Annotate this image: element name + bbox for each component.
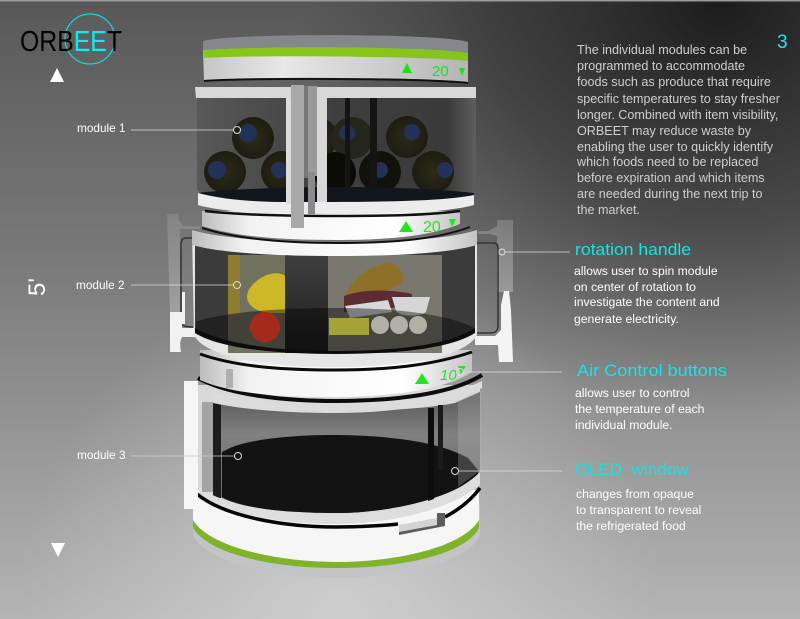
callout: OLED window: OLED window bbox=[575, 460, 690, 479]
module 2 bbox=[167, 214, 513, 370]
base drawer handle bbox=[399, 513, 445, 535]
description paragraph: foods such as produce that require bbox=[577, 75, 771, 89]
refrigerator product illustration bbox=[167, 35, 513, 578]
leader: module 1: module 1 bbox=[77, 121, 126, 135]
callout: OLED window: the refrigerated food bbox=[576, 519, 686, 533]
top unit with temperature display 20: 20 bbox=[432, 63, 449, 80]
leader: module 1 bbox=[77, 121, 240, 135]
height arrow up bbox=[50, 68, 64, 82]
callout: rotation handle: rotation handle bbox=[575, 240, 691, 259]
bottom rim bbox=[198, 193, 474, 214]
description paragraph: programmed to accommodate bbox=[577, 59, 745, 73]
upper rim bbox=[213, 381, 482, 413]
wine bottles bbox=[204, 116, 454, 194]
callout: rotation handle: investigate the content and bbox=[574, 295, 720, 309]
description paragraph: before expiration and which items bbox=[577, 171, 765, 185]
top rim bbox=[192, 230, 477, 256]
lower rim and base line bbox=[200, 472, 480, 524]
callout: Air Control buttons: the temperature of each bbox=[575, 402, 704, 416]
top rim bbox=[195, 87, 476, 202]
description paragraph: the market. bbox=[577, 203, 640, 217]
callout: Air Control buttons: allows user to control bbox=[575, 386, 689, 400]
connector with temperature display 10: 10 bbox=[440, 367, 457, 384]
description paragraph: longer. Combined with item visibility, bbox=[577, 108, 778, 122]
module 1 with wine bottles bbox=[195, 85, 476, 228]
description paragraph: specific temperatures to stay fresher bbox=[577, 92, 780, 106]
shelf bbox=[198, 187, 474, 203]
description paragraph: are needed during the next trip to bbox=[577, 187, 763, 201]
logo: ORBEET: ORBEET bbox=[20, 26, 122, 58]
food photo bbox=[228, 255, 442, 353]
connector with temperature display 10 bbox=[200, 350, 472, 397]
right rotation handle bbox=[475, 220, 513, 362]
door handle bbox=[184, 381, 198, 509]
description paragraph: ORBEET may reduce waste by bbox=[577, 124, 752, 138]
description paragraph: enabling the user to quickly identify bbox=[577, 140, 774, 154]
leader: module 2: module 2 bbox=[76, 278, 125, 292]
base and module 3 bbox=[184, 375, 482, 578]
callout: OLED window bbox=[452, 460, 705, 533]
connector with temperature display 20 bbox=[202, 211, 470, 243]
logo: ORBEET bbox=[20, 14, 122, 64]
window bbox=[195, 243, 475, 353]
connector with temperature display 20: 20 bbox=[423, 219, 441, 236]
leader: module 3: module 3 bbox=[77, 448, 126, 462]
callout: OLED window: to transparent to reveal bbox=[576, 503, 701, 517]
height arrow down bbox=[51, 543, 65, 557]
callout: rotation handle: generate electricity. bbox=[574, 312, 679, 326]
door bars bbox=[291, 85, 304, 228]
OLED window bbox=[220, 392, 480, 513]
callout: rotation handle bbox=[499, 240, 723, 326]
leader: module 2 bbox=[76, 278, 240, 292]
callout: OLED window: changes from opaque bbox=[576, 487, 694, 501]
callout: rotation handle: allows user to spin module bbox=[574, 264, 718, 278]
top unit with temperature display 20 bbox=[203, 35, 468, 83]
description paragraph: The individual modules can be bbox=[577, 43, 747, 57]
height label: 5' bbox=[24, 278, 51, 296]
callout: Air Control buttons bbox=[456, 361, 727, 432]
leader: module 3 bbox=[77, 448, 242, 462]
callout: Air Control buttons: Air Control buttons bbox=[577, 361, 727, 380]
callout: Air Control buttons: individual module. bbox=[575, 418, 673, 432]
description paragraph: which foods need to be replaced bbox=[576, 155, 758, 169]
page number: 3 bbox=[777, 32, 788, 53]
left rotation handle bbox=[167, 214, 200, 352]
callout: rotation handle: on center of rotation to bbox=[574, 280, 696, 294]
